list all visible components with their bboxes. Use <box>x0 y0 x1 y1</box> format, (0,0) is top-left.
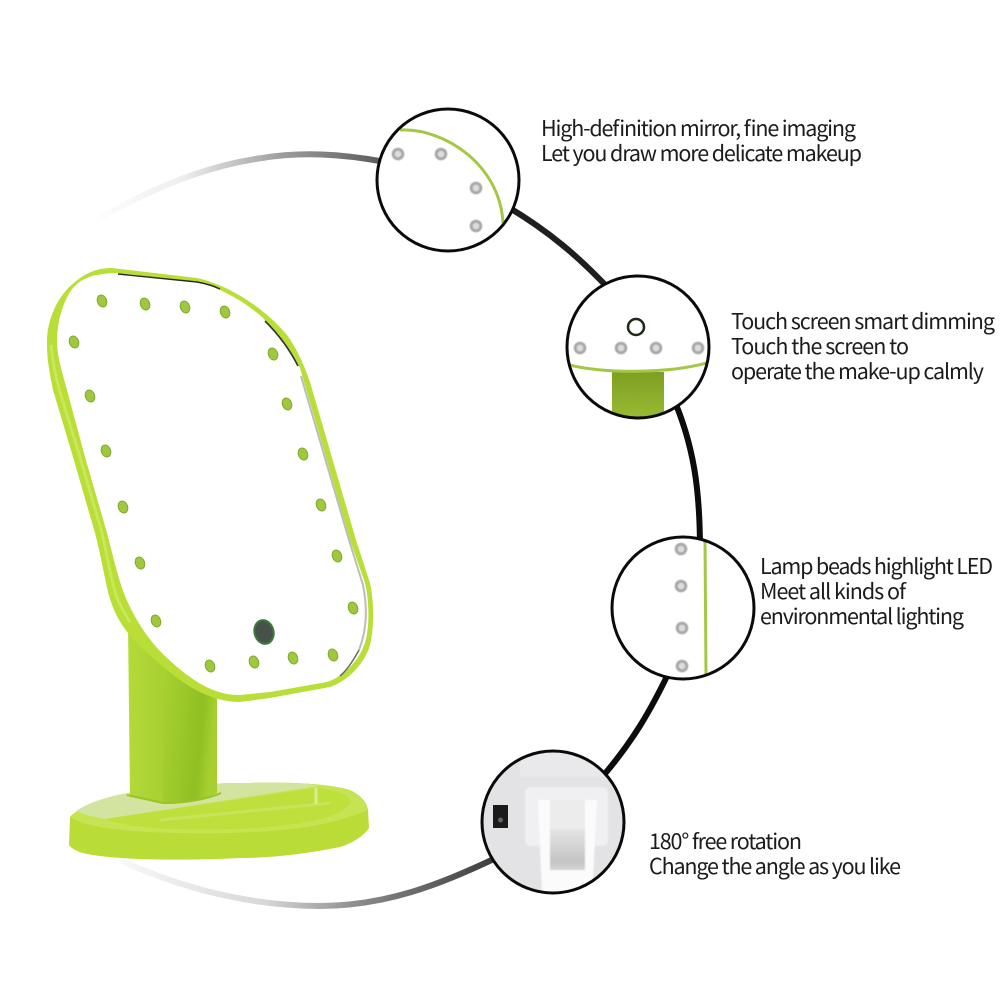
power switch <box>493 805 508 828</box>
caption: free rotation: Change the angle as you like <box>649 850 901 881</box>
hinge arm <box>538 800 597 895</box>
connecting arc <box>60 154 700 906</box>
green stand <box>612 372 664 416</box>
touch button <box>252 618 276 646</box>
caption: high-definition mirror: High-definition mirror, fine imaging <box>541 112 856 143</box>
mirror stand <box>127 625 221 803</box>
mirror frame <box>47 268 373 702</box>
beads <box>575 343 703 353</box>
caption: touch screen dimming: Touch the screen to <box>731 330 909 361</box>
detail circle: touch dimmer <box>566 276 710 422</box>
green frame edge <box>400 130 503 223</box>
caption: free rotation <box>649 825 901 881</box>
upper panel <box>520 750 605 777</box>
caption: free rotation: 180° free rotation <box>649 825 802 856</box>
green frame edge <box>705 540 706 676</box>
caption: touch screen dimming: Touch screen smart dimming <box>731 305 995 336</box>
mirror base <box>69 783 369 860</box>
caption: lamp beads: Meet all kinds of <box>760 575 907 606</box>
caption: high-definition mirror: Let you draw more delicate makeup <box>541 137 862 168</box>
caption: lamp beads: environmental lighting <box>760 600 964 631</box>
mirror edge reflection <box>118 274 366 676</box>
LED beads <box>68 294 359 673</box>
beads <box>393 149 481 231</box>
mirror glass <box>57 273 368 695</box>
detail circle: high-definition mirror <box>377 109 519 251</box>
frame highlight <box>51 345 130 622</box>
green frame edge <box>566 362 710 371</box>
caption: lamp beads: Lamp beads highlight LED <box>760 550 993 581</box>
hinge cylinder <box>550 800 585 830</box>
product: green LED mirror on stand <box>47 268 373 860</box>
trinket tray <box>105 788 350 830</box>
touch ring <box>628 319 644 335</box>
hinge housing <box>525 787 608 846</box>
caption: high-definition mirror <box>541 112 862 168</box>
caption: touch screen dimming <box>731 305 995 386</box>
caption: touch screen dimming: operate the make-up calmly <box>731 355 984 386</box>
detail circle: rotating hinge <box>482 750 624 895</box>
beads <box>676 544 687 671</box>
caption: lamp beads <box>760 550 993 631</box>
detail circle: lamp beads <box>612 537 754 679</box>
